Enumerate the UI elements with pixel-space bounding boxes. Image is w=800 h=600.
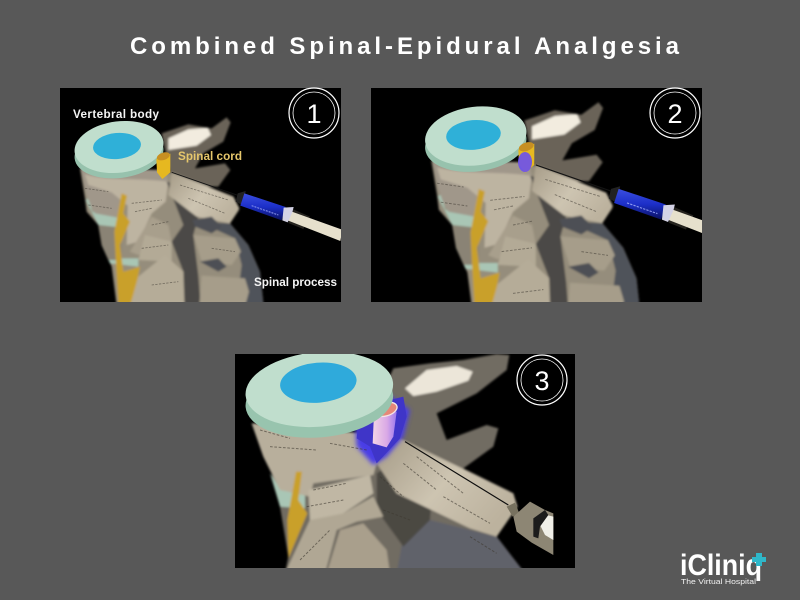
step number 3 (517, 355, 567, 405)
panel: step 1 (60, 88, 342, 318)
label: spinal cord: Spinal cord (178, 150, 242, 163)
step number 2 (650, 88, 700, 138)
icon: plus (752, 553, 766, 566)
illustration: spine with needle, step 2 (425, 102, 702, 302)
panel: step 3 (235, 346, 575, 573)
step number 3: 3 (534, 366, 550, 396)
logo: iCliniq: iCliniq (680, 549, 762, 582)
illustration: close-up spine with catheter, step 3 (242, 346, 553, 573)
step number 1: 1 (306, 99, 322, 129)
title: Combined Spinal-Epidural Analgesia (130, 33, 680, 60)
logo tagline: The Virtual Hospital (681, 577, 756, 586)
panel: step 2 (371, 87, 702, 302)
label: vertebral body: Vertebral body (73, 108, 159, 121)
label: spinal process: Spinal process (254, 276, 337, 289)
illustration: spine with needle, step 1 (72, 116, 342, 318)
step number 1 (289, 88, 339, 138)
step number 2: 2 (667, 99, 683, 129)
